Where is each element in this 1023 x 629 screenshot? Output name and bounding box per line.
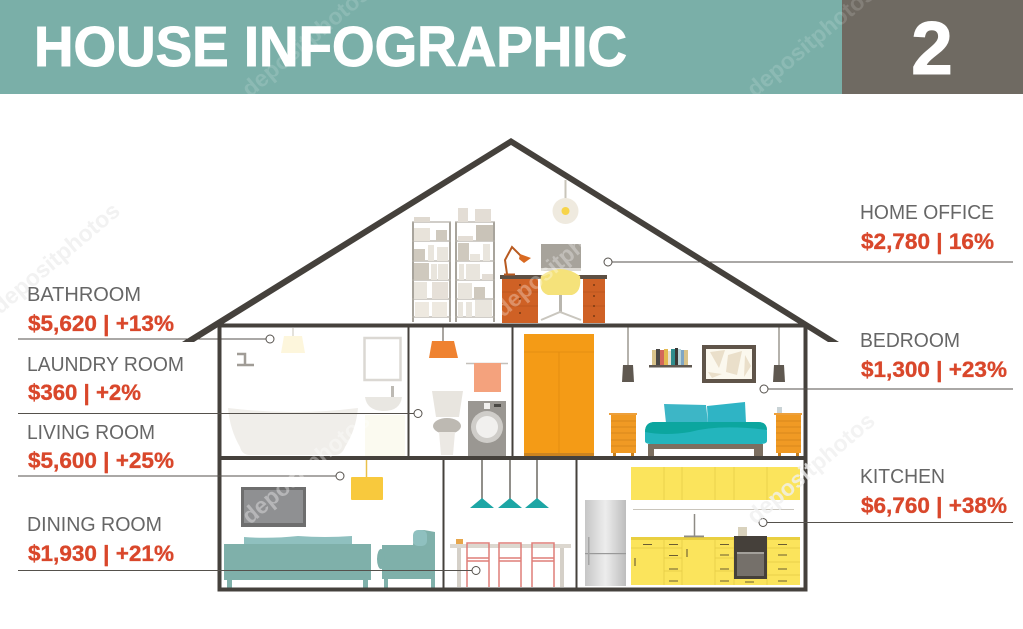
- vanity cabinet: [365, 415, 405, 456]
- bathtub: [228, 408, 358, 455]
- label: bathroom: BATHROOM: [27, 283, 141, 306]
- framed picture: [704, 347, 754, 381]
- desk: [500, 275, 607, 323]
- pendant lamp: [552, 180, 578, 224]
- sink and faucet: [684, 514, 704, 537]
- room partitions: [408, 327, 576, 588]
- television: [241, 487, 306, 527]
- wardrobe: [524, 334, 594, 456]
- mirror: [364, 338, 400, 380]
- bedroom fixtures: [524, 327, 802, 456]
- orange lamp: [429, 327, 458, 358]
- cooking pot: [738, 527, 747, 536]
- label: laundry room: [27, 353, 184, 405]
- upper floor rooms: [228, 327, 802, 456]
- label: kitchen: KITCHEN: [860, 465, 945, 488]
- page number box: [842, 0, 1023, 94]
- label: laundry room: LAUNDRY ROOM: [27, 353, 184, 376]
- lamp shade: [519, 254, 531, 263]
- label: dining room: [27, 513, 174, 566]
- washbasin: [365, 386, 402, 411]
- walls and floors: [218, 325, 807, 590]
- callout leader: kitchen: [759, 518, 1013, 526]
- dining room fixtures: [450, 459, 571, 587]
- attic furniture: home office: [412, 180, 607, 323]
- title: HOUSE INFOGRAPHIC: [34, 15, 627, 79]
- header banner: [0, 0, 842, 94]
- page number: 2: [911, 6, 953, 90]
- yellow pendant lamp: [351, 459, 383, 500]
- roof: [182, 138, 839, 342]
- ceiling lamp: [281, 328, 305, 353]
- callout leader: dining room: [18, 566, 480, 574]
- callout leader: bathroom: [18, 335, 274, 343]
- oven: [734, 536, 767, 579]
- upper cabinets: [631, 467, 800, 500]
- label: bedroom: $1,300 | +23%: [861, 357, 1007, 382]
- callout leader: living room: [18, 472, 344, 480]
- label: home office: HOME OFFICE: [860, 201, 994, 224]
- nightstand right: [774, 407, 802, 456]
- house shell: [182, 138, 839, 590]
- towel: [474, 363, 501, 392]
- label: laundry room: $360 | +2%: [28, 380, 141, 405]
- label: kitchen: $6,760 | +38%: [861, 493, 1007, 518]
- label: bedroom: [860, 329, 1007, 382]
- label: home office: $2,780 | 16%: [861, 229, 994, 254]
- callout leader: laundry room: [18, 410, 422, 418]
- left bookshelf: [412, 217, 451, 322]
- washing machine: [468, 401, 506, 456]
- armchair: [377, 530, 435, 588]
- sofa: [224, 536, 371, 588]
- bookshelf with books: [649, 348, 692, 368]
- nightstand left: [609, 413, 637, 456]
- label: bathroom: $5,620 | +13%: [28, 311, 174, 336]
- bed: [645, 402, 767, 456]
- wall tap: [237, 354, 254, 365]
- bathroom fixtures: [228, 328, 405, 456]
- utensil rail: [633, 508, 794, 510]
- dining table: [450, 539, 571, 587]
- label: dining room: DINING ROOM: [27, 513, 162, 536]
- label: bathroom: [27, 283, 174, 336]
- watermarks: depositphotos: [490, 200, 628, 322]
- laundry room fixtures: [429, 327, 508, 456]
- pendant lamp right: [773, 327, 785, 382]
- label: home office: [860, 201, 994, 254]
- desk lamp: [504, 247, 522, 274]
- label: dining room: $1,930 | +21%: [28, 541, 174, 566]
- fridge: [585, 500, 626, 586]
- chairs: [467, 543, 554, 587]
- base cabinets: [631, 537, 800, 585]
- watermarks: [0, 0, 880, 529]
- label: kitchen: [860, 465, 1007, 518]
- label: living room: $5,600 | +25%: [28, 448, 174, 473]
- monitor: [541, 244, 581, 271]
- towel rail: [466, 362, 508, 364]
- label: bedroom: BEDROOM: [860, 329, 960, 352]
- callout leader: home office: [604, 258, 1013, 266]
- label: living room: [27, 421, 174, 473]
- pendant lamps: [470, 459, 549, 508]
- label: living room: LIVING ROOM: [27, 421, 155, 444]
- right bookshelf: [455, 208, 495, 322]
- living room fixtures: [224, 459, 435, 588]
- callout leader: bedroom: [760, 385, 1013, 393]
- watermarks: depositphotos: [237, 407, 375, 529]
- office chair: [540, 269, 581, 320]
- kitchen fixtures: [585, 467, 800, 586]
- watermarks: depositphotos: [742, 407, 880, 529]
- toilet: [432, 391, 463, 455]
- lower floor rooms: [224, 459, 800, 588]
- pendant lamp left: [622, 327, 634, 382]
